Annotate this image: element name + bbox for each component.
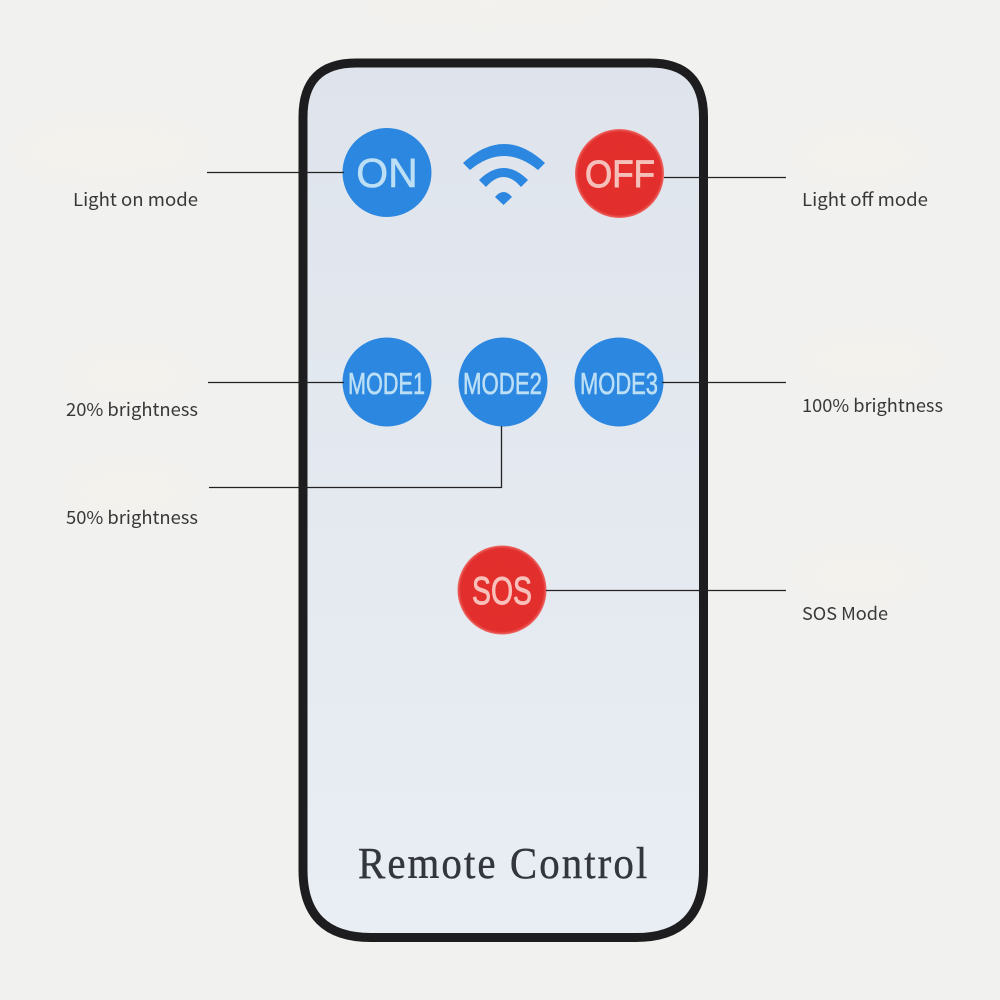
icon: wifi — [463, 144, 545, 205]
remote control body — [303, 63, 704, 938]
button: MODE1 — [342, 338, 432, 426]
remote control caption: Remote Control — [358, 840, 647, 888]
callout label: SOS: SOS Mode — [802, 600, 888, 626]
callout label: 100%: 100% brightness — [802, 392, 943, 418]
callout line: light off — [664, 176, 786, 178]
callout label: 50%: 50% brightness — [66, 504, 198, 530]
callout line: 20% — [208, 382, 344, 384]
button: ON: ON — [356, 150, 418, 196]
button: SOS: SOS — [472, 570, 532, 613]
button: MODE2: MODE2 — [463, 366, 542, 401]
button: OFF — [575, 129, 664, 218]
callout line: light on — [207, 172, 344, 174]
button: OFF: OFF — [585, 154, 655, 196]
callout label: light on: Light on mode — [73, 186, 198, 212]
callout label: light off: Light off mode — [802, 186, 928, 212]
callout line: SOS — [546, 590, 786, 592]
button: MODE3 — [574, 338, 664, 426]
callout line: 100% — [662, 382, 786, 384]
button: ON — [342, 128, 432, 217]
button: SOS — [458, 546, 546, 634]
button: MODE2 — [458, 338, 548, 426]
button: MODE3: MODE3 — [580, 366, 658, 401]
callout label: 20%: 20% brightness — [66, 396, 198, 422]
button: MODE1: MODE1 — [348, 366, 425, 401]
callout line: 50% — [209, 426, 502, 488]
